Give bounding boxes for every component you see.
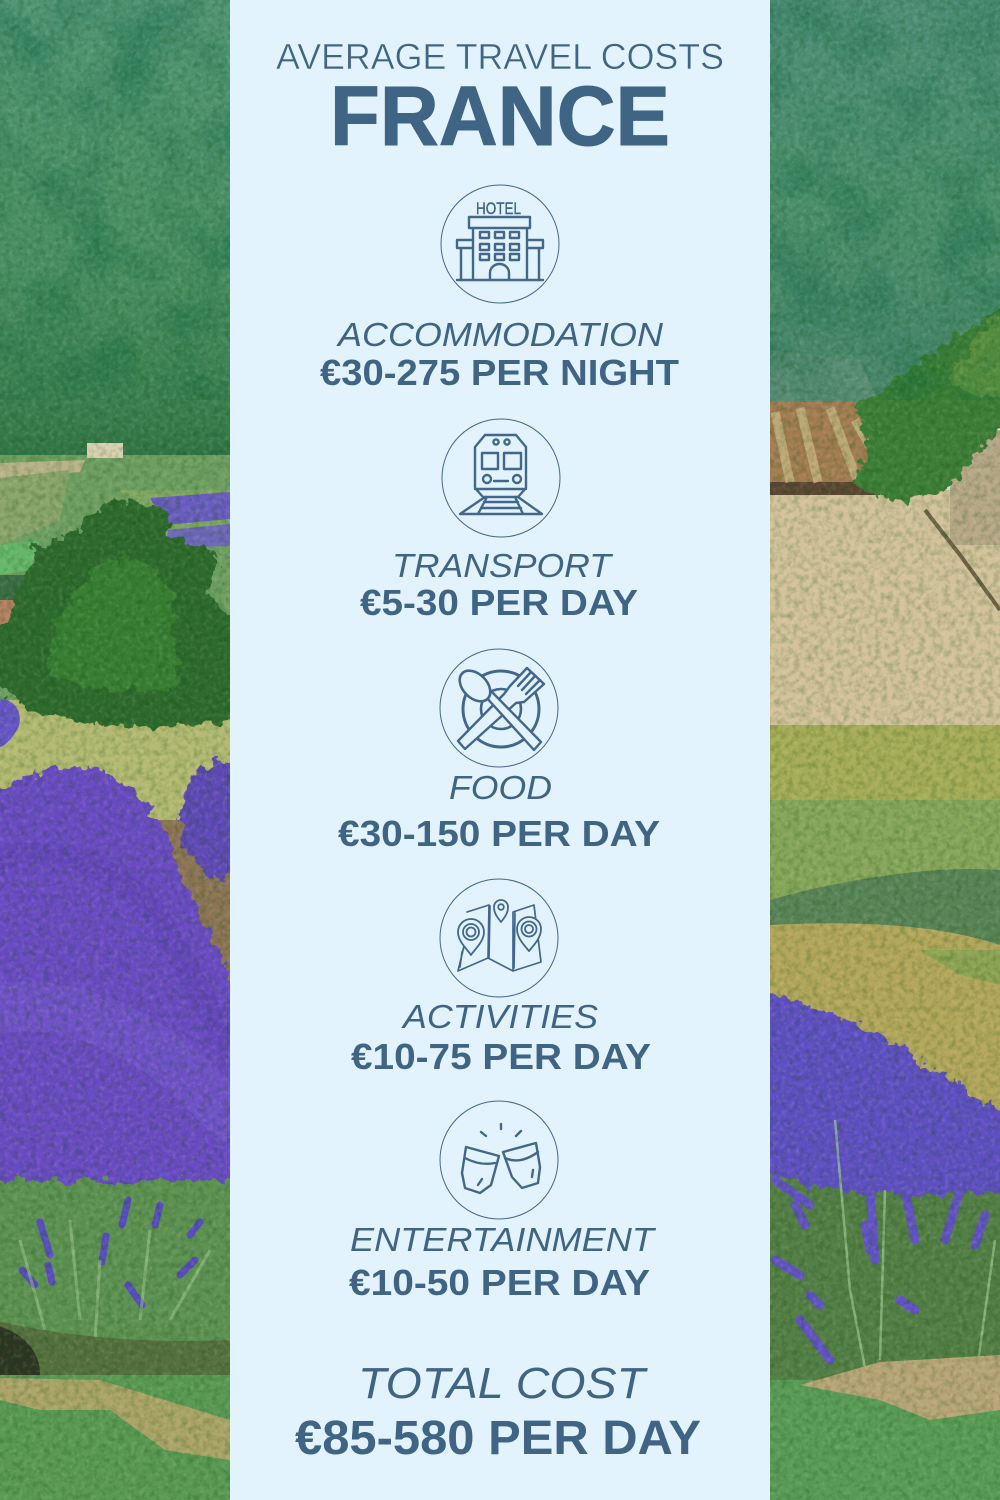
section: total cost	[295, 1359, 701, 1465]
heading	[276, 36, 724, 163]
title: France: FRANCE	[330, 69, 670, 163]
label: food: FOOD	[449, 769, 552, 806]
label: accommodation: ACCOMMODATION	[336, 316, 663, 353]
central panel	[230, 0, 770, 1500]
right tree foliage	[856, 295, 1000, 499]
icon: hotel: HOTEL	[476, 199, 521, 218]
title line: AVERAGE TRAVEL COSTS	[276, 36, 724, 77]
icon: clinking glasses	[440, 1101, 558, 1219]
cost: activities: €10-75 PER DAY	[351, 1036, 651, 1077]
cost: food: €30-150 PER DAY	[338, 813, 660, 854]
cost: accommodation: €30-275 PER NIGHT	[320, 352, 679, 393]
cost: total: €85-580 PER DAY	[295, 1412, 701, 1465]
icon: hotel	[441, 185, 559, 303]
section: activities	[351, 879, 651, 1077]
left photo strip	[0, 0, 230, 1500]
right lavender mound	[750, 990, 1000, 1196]
left lavender rows	[0, 756, 230, 1149]
icon: map with pins	[440, 879, 558, 997]
label: transport: TRANSPORT	[392, 547, 614, 584]
icon: train	[442, 419, 560, 537]
cost: entertainment: €10-50 PER DAY	[349, 1262, 650, 1303]
label: activities: ACTIVITIES	[401, 998, 598, 1035]
label: total cost: TOTAL COST	[358, 1359, 648, 1408]
section: food	[338, 649, 660, 854]
left pine tree	[0, 495, 240, 727]
section: transport	[360, 419, 638, 623]
label: entertainment: ENTERTAINMENT	[350, 1221, 657, 1258]
right photo strip	[750, 0, 1000, 1500]
section: entertainment	[349, 1101, 657, 1303]
icon: plate and cutlery	[440, 649, 558, 767]
section: accommodation	[320, 185, 679, 393]
cost: transport: €5-30 PER DAY	[360, 582, 638, 623]
